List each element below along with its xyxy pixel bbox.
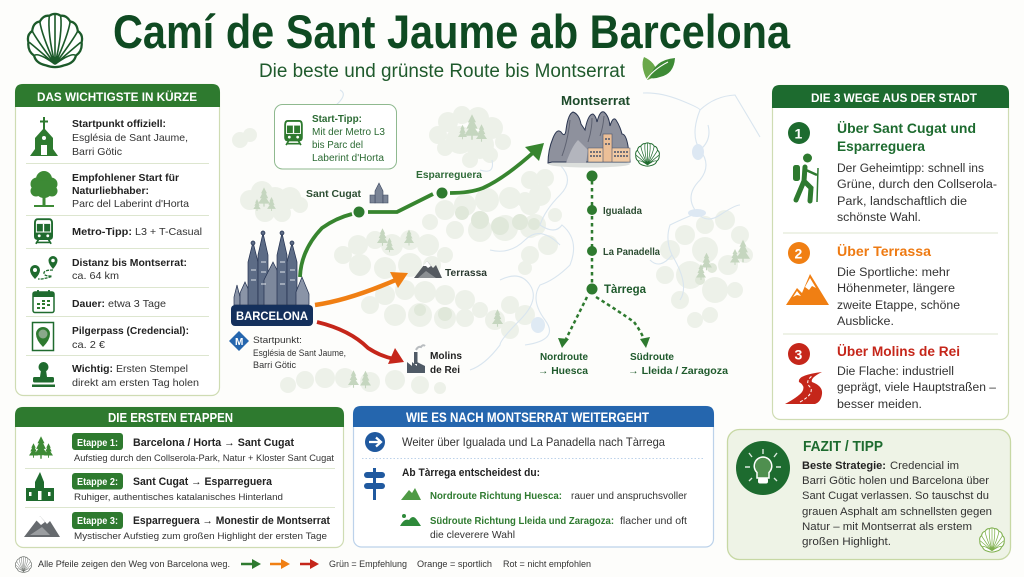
panel: die ersten Etappen [15, 407, 344, 548]
arrow: orange route [315, 272, 408, 305]
icon: Sant Cugat church [370, 183, 388, 203]
icon: train [285, 121, 302, 145]
icon: arrow circle [365, 432, 385, 452]
text: route 1: Über Sant Cugat und [837, 121, 976, 136]
text: route 2: zweite Etappe, schöne [837, 300, 960, 312]
icon: south hills [400, 514, 421, 526]
heading: DIE 3 WEGE AUS DER STADT [811, 91, 978, 105]
callout text: Start-Tipp: [312, 114, 362, 125]
label: Molins de Rei: Molins [430, 350, 462, 362]
icon: Montserrat mountain and monastery [548, 112, 630, 168]
icon: shell [980, 528, 1004, 552]
row: Dauer: etwa 3 Tage [108, 298, 166, 310]
label: Esparreguera: Esparreguera [416, 169, 482, 181]
text: route 1: Der Geheimtipp: schnell ins [837, 163, 984, 175]
text: Südroute: die cleverere Wahl [430, 529, 515, 541]
row: Etappe 1: Etappe 1: [77, 437, 118, 449]
text: Startpunkt: Startpunkt: [253, 335, 302, 346]
label: Tàrrega: Tàrrega [604, 282, 646, 296]
text: route 2: Über Terrassa [837, 244, 932, 259]
row: Dauer: Dauer: [72, 298, 105, 310]
label: Igualada: Igualada [603, 206, 642, 217]
row: Pilgerpass: Pilgerpass (Credencial): [72, 325, 189, 337]
callout text: Laberint d'Horta [312, 153, 384, 164]
icon: metro diamond [229, 331, 249, 351]
badge: 3: 3 [794, 346, 802, 362]
map background [232, 90, 760, 394]
panel: das Wichtigste in Kürze [15, 84, 220, 396]
badge: 1 [788, 122, 810, 144]
row: Metro-Tipp [72, 226, 202, 238]
row: Wichtig [72, 363, 199, 389]
text: Startpunkt: Església de Sant Jaume, [253, 348, 346, 359]
callout text: bis Parc del [312, 140, 363, 151]
text: Nordroute [430, 490, 687, 502]
text: route 2: Höhenmeter, längere [837, 283, 955, 295]
icon: north mountains [401, 488, 421, 500]
icon: shell near Montserrat [636, 143, 659, 166]
text: route 2 [837, 244, 960, 328]
row: Pilgerpass [72, 325, 189, 351]
icon: metro diamond: M [235, 337, 243, 348]
row: Etappe 3: Mystischer Aufstieg zum großen Highlight der ersten Tage [74, 531, 327, 542]
icon: scallop shell logo [28, 14, 82, 67]
legend key: Grün = Empfehlung [329, 559, 407, 570]
row: Distanz [72, 257, 187, 282]
badge: 3 [788, 343, 810, 365]
row: Startpunkt: Església de Sant Jaume, [72, 132, 188, 144]
icon: legend shell [15, 557, 32, 572]
text: Südroute: Südroute Richtung Lleida und Zaragoza: [430, 515, 614, 527]
row: Etappe 3: Etappe 3: [77, 515, 118, 527]
continuing dotted route [558, 170, 650, 348]
row: Etappe 3 [72, 512, 330, 542]
text: Nordroute: Nordroute Richtung Huesca: [430, 490, 562, 502]
text: Südroute: flacher und oft [620, 515, 687, 527]
icon: route pins [30, 256, 58, 279]
heading: FAZIT / TIPP [803, 439, 883, 455]
text: Strategie [802, 460, 992, 548]
text: route 3: Über Molins de Rei [837, 344, 960, 359]
row: Wichtig: Ersten Stempel [116, 363, 188, 375]
text: route 2: Die Sportliche: mehr [837, 267, 950, 279]
legend key [329, 559, 591, 570]
text: route 3 [837, 344, 997, 411]
arrow: red route [317, 322, 404, 364]
text: route 1: Esparreguera [837, 139, 925, 154]
row: Wichtig: direkt am ersten Tag holen [72, 377, 199, 389]
text: Strategie: grauen Asphalt am schnellsten gegen [802, 506, 992, 518]
text: route 1: Grüne, durch den Collserola- [837, 179, 997, 191]
text: Südroute [430, 515, 687, 541]
arrow: orange [270, 559, 290, 569]
label: Molins de Rei [430, 350, 462, 376]
row: Empfohlener Start: Parc del Laberint d'Horta [72, 198, 189, 210]
text: Strategie: Barri Götic holen und Barcelona über [802, 475, 989, 487]
legend text: Alle Pfeile zeigen den Weg von Barcelona weg. [38, 559, 230, 570]
label: Südroute: Südroute [630, 352, 674, 363]
row: Startpunkt [72, 118, 188, 158]
row: Metro-Tipp: L3 + T-Casual [135, 226, 202, 238]
icon: signpost [364, 468, 385, 500]
row: Empfohlener Start: Empfohlener Start für [72, 172, 179, 184]
panel: die 3 Wege aus der Stadt [772, 85, 1009, 420]
label: Molins de Rei: de Rei [430, 364, 460, 376]
icon: Terrassa mountain [414, 261, 442, 278]
row: Empfohlener Start: Naturliebhaber: [72, 185, 149, 197]
panel header [15, 407, 344, 427]
text: Strategie: Natur – mit Montserrat als erstem [802, 521, 972, 533]
row: Etappe 1: Barcelona / Horta → Sant Cugat [133, 437, 294, 449]
label: Nordroute: Nordroute [540, 352, 588, 363]
label: Nordroute: → Huesca [538, 366, 588, 377]
heading: DAS WICHTIGSTE IN KÜRZE [37, 89, 197, 104]
icon: Sagrada Familia [234, 231, 309, 305]
label: Südroute [628, 352, 728, 377]
icon: tree [30, 171, 58, 207]
heading: WIE ES NACH MONTSERRAT WEITERGEHT [406, 410, 650, 425]
icon: red road [785, 372, 822, 404]
arrow: green recommended route [300, 143, 544, 277]
callout text [312, 114, 385, 164]
panel: Fazit / Tipp [728, 430, 1010, 560]
text: weiter: Weiter über Igualada und La Panadella nach Tàrrega [402, 435, 665, 449]
legend key: Rot = nicht empfohlen [503, 559, 591, 570]
panel header [772, 85, 1009, 108]
arrow: green [241, 559, 261, 569]
text: Strategie: großen Highlight. [802, 536, 891, 548]
text: route 3: besser meiden. [837, 399, 922, 411]
text: route 1: schönste Wahl. [837, 212, 921, 224]
label: Sant Cugat: Sant Cugat [306, 188, 361, 200]
text: Startpunkt: Barri Götic [253, 360, 296, 371]
map: routes from Barcelona [229, 93, 728, 377]
row: Etappe 2: Sant Cugat → Esparreguera [133, 476, 273, 488]
text: route 1: Park, landschaftlich die [837, 196, 967, 208]
label: Barcelona: BARCELONA [236, 309, 308, 323]
text: route 3: geprägt, viele Hauptstraßen – [837, 382, 997, 394]
label: Barcelona [231, 305, 313, 326]
label: Südroute: → Lleida / Zaragoza [628, 366, 728, 377]
title: Camí de Sant Jaume ab Barcelona [113, 5, 791, 58]
text: Startpunkt [253, 335, 346, 371]
subtitle: Die beste und grünste Route bis Montserrat [259, 61, 626, 82]
text: ab Tàrrega: Ab Tàrrega entscheidest du: [402, 467, 540, 479]
row: Distanz: ca. 64 km [72, 270, 119, 282]
icon: light bulb [736, 441, 790, 495]
row: Etappe 3: Esparreguera → Monestir de Montserrat [133, 515, 330, 527]
callout: Start-Tipp [274, 104, 396, 169]
icon: stamp [32, 362, 55, 387]
panel header [353, 406, 714, 427]
row: Etappe 2: Etappe 2: [77, 476, 118, 488]
row: Etappe 1: Aufstieg durch den Collserola-Park, Natur + Kloster Sant Cugat [74, 453, 334, 464]
label: La Panadella: La Panadella [603, 247, 660, 258]
icon: trees [29, 436, 53, 459]
icon: hiker [793, 154, 818, 202]
label: Montserrat: Montserrat [561, 93, 631, 108]
arrow: red [300, 559, 319, 569]
badge: 2 [788, 242, 810, 264]
row: Startpunkt: Startpunkt offiziell: [72, 118, 166, 130]
row: Startpunkt: Barri Götic [72, 146, 122, 158]
text: Strategie: Sant Cugat verlassen. So tauschst du [802, 490, 989, 502]
callout text: Mit der Metro L3 [312, 127, 385, 138]
row: Etappe 2 [72, 473, 283, 503]
panel: wie es nach Montserrat weitergeht [353, 406, 714, 547]
legend key: Orange = sportlich [417, 559, 492, 570]
row: Etappe 2: Ruhiger, authentisches katalanisches Hinterland [74, 492, 283, 503]
icon: metro train [35, 219, 52, 244]
text: route 1 [837, 121, 997, 224]
label: Nordroute [538, 352, 588, 377]
text: Strategie: Beste Strategie: [802, 460, 886, 472]
row: Distanz: Distanz bis Montserrat: [72, 257, 187, 269]
text: Strategie: Credencial im [890, 460, 959, 472]
badge: 2: 2 [794, 246, 802, 262]
text: route 3: Die Flache: industriell [837, 366, 954, 378]
icon: orange mountain [786, 274, 829, 305]
icon: church [30, 117, 58, 156]
icon: monastery [26, 472, 54, 501]
legend [15, 557, 591, 572]
panel header [15, 84, 220, 107]
heading: DIE ERSTEN ETAPPEN [108, 410, 233, 425]
icon: leaf [643, 57, 675, 82]
label: Terrassa: Terrassa [445, 267, 487, 279]
row: Etappe 1 [72, 433, 334, 464]
row: Metro-Tipp: Metro-Tipp: [72, 226, 132, 238]
text: route 2: Ausblicke. [837, 316, 894, 328]
icon: grey mountain [24, 516, 60, 537]
row: Pilgerpass: ca. 2 € [72, 339, 105, 351]
icon: pilgrim passport [32, 322, 54, 350]
icon: Molins factory [407, 345, 425, 373]
row: Wichtig: Wichtig: [72, 363, 113, 375]
row: Dauer [72, 298, 166, 310]
row: Empfohlener Start [72, 172, 189, 210]
icon: calendar [33, 290, 54, 312]
badge: 1: 1 [794, 126, 802, 142]
text: Nordroute: rauer und anspruchsvoller [571, 490, 687, 502]
